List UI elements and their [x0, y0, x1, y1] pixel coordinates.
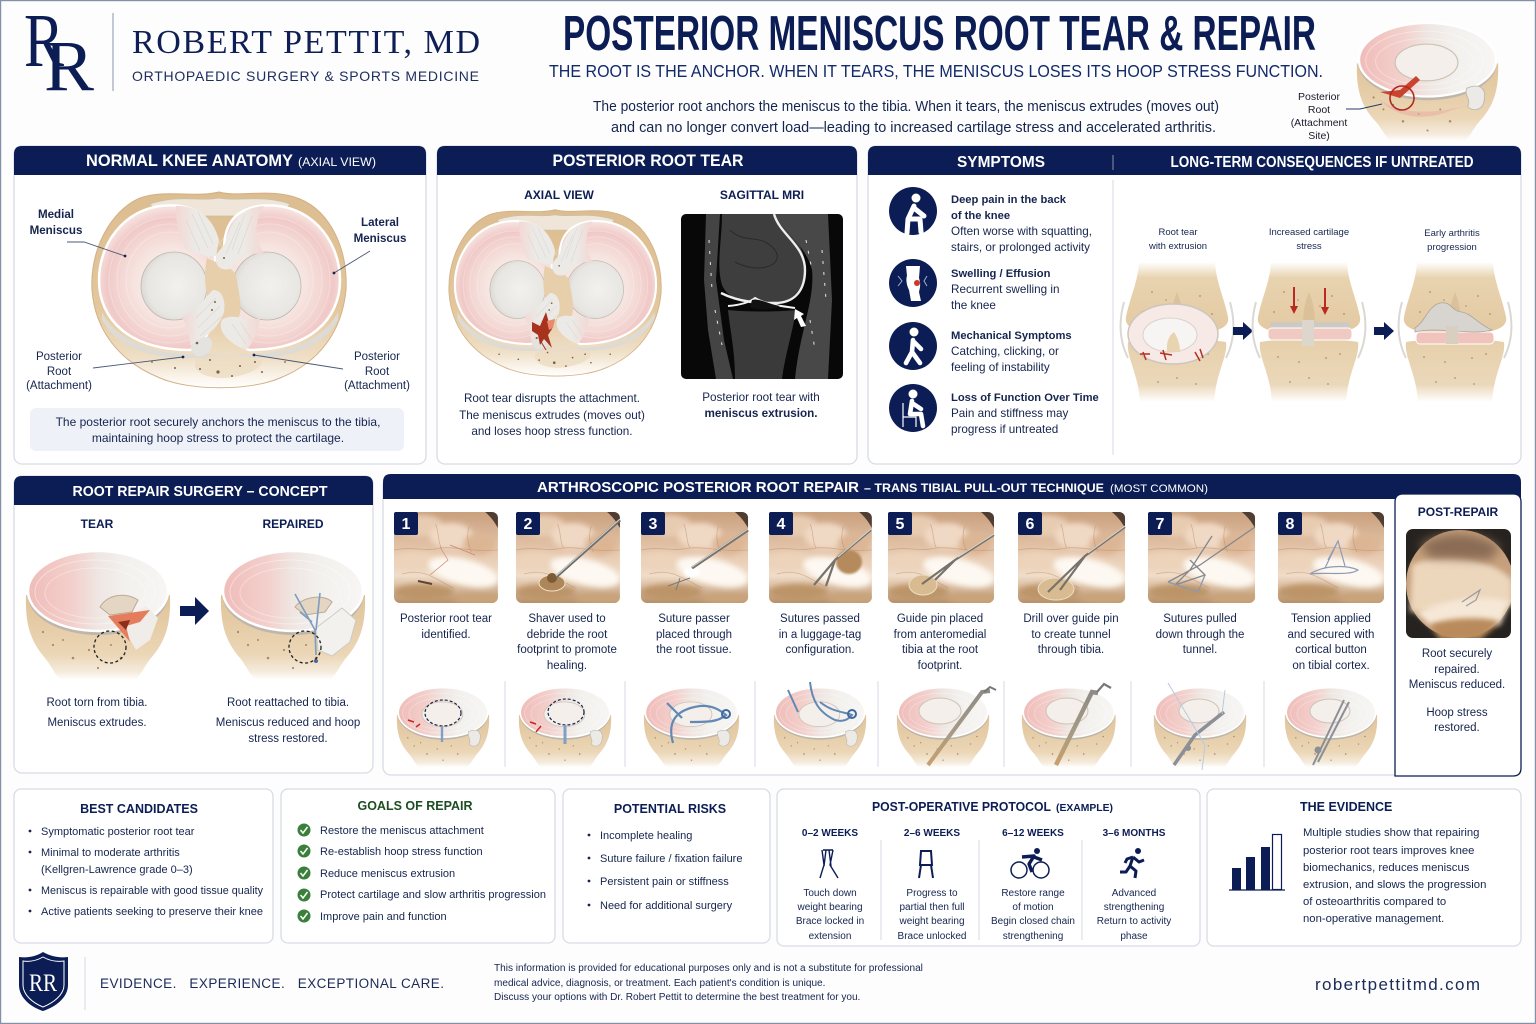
icon: person with knee pain — [889, 187, 937, 235]
label: posterior root left: (Attachment) — [26, 380, 92, 392]
caption 5: Guide pin placed — [897, 613, 983, 625]
symptom: mechanical — [889, 322, 1072, 374]
stage: root tear with extrusion — [1121, 227, 1233, 402]
label: posterior root left: Posterior — [36, 351, 82, 363]
post-repair text: Hoop stress — [1426, 707, 1488, 719]
step number 4 — [769, 512, 793, 535]
symptom: swelling: Recurrent swelling in — [951, 283, 1059, 296]
risk list: Incomplete healing — [600, 830, 692, 842]
disclaimer: medical advice, diagnosis, or treatment. Each patient's condition is unique. — [494, 978, 825, 989]
step number 1 — [394, 512, 418, 535]
step 1 — [390, 512, 504, 768]
caption 5: from anteromedial — [894, 629, 986, 641]
footer slogan: EVIDENCE. EXPERIENCE. EXCEPTIONAL CARE. — [100, 976, 444, 991]
symptom: mechanical: feeling of instability — [951, 361, 1050, 374]
tear illustration — [26, 551, 170, 680]
heading: ROOT REPAIR SURGERY – CONCEPT — [72, 484, 328, 500]
step number 4: 4 — [777, 516, 786, 533]
goal list: Reduce meniscus extrusion — [320, 868, 455, 880]
evidence text: posterior root tears improves knee — [1303, 845, 1474, 857]
caption 4: in a luggage-tag — [779, 629, 861, 641]
stage: root tear with extrusion: Root tear — [1158, 227, 1198, 238]
mri description: Posterior root tear with — [702, 391, 820, 404]
phase: 3-6 months: phase — [1120, 931, 1148, 942]
step number 2 — [516, 512, 540, 535]
goal list — [298, 824, 546, 923]
post-repair text: Root securely — [1422, 648, 1492, 660]
axial knee with tear — [449, 210, 661, 376]
intro paragraph — [593, 99, 1219, 136]
stage: increased cartilage stress: Increased cartilage — [1269, 227, 1349, 238]
caption 1: identified. — [421, 629, 471, 641]
callout label: Posterior — [1298, 91, 1341, 103]
post-repair text: Meniscus reduced. — [1409, 679, 1505, 691]
phase: 0-2 weeks: Touch down — [803, 888, 857, 899]
caption 2: debride the root — [527, 629, 608, 641]
caption 8: cortical button — [1295, 644, 1367, 656]
repaired sub-heading: REPAIRED — [262, 517, 324, 531]
step 7 — [1144, 512, 1261, 770]
post-repair text: restored. — [1434, 722, 1480, 734]
heading: BEST CANDIDATES — [80, 802, 198, 816]
candidate list: Meniscus is repairable with good tissue quality — [41, 885, 263, 897]
label: medial meniscus — [30, 208, 126, 257]
phase: 6-12 weeks: of motion — [1012, 902, 1054, 913]
symptom: loss of function: progress if untreated — [951, 423, 1058, 436]
post-repair heading: POST-REPAIR — [1418, 505, 1499, 519]
step number 5 — [888, 512, 912, 535]
caption 2: healing. — [547, 660, 587, 672]
goal list: Protect cartilage and slow arthritis progression — [320, 889, 546, 901]
mri description: meniscus extrusion. — [704, 407, 818, 420]
note box: maintaining hoop stress to protect the cartilage. — [92, 431, 344, 445]
step number 8: 8 — [1286, 516, 1295, 533]
monogram logo — [24, 0, 94, 106]
candidate list: Symptomatic posterior root tear — [41, 826, 195, 838]
caption 4: configuration. — [785, 644, 855, 656]
symptom: swelling: Swelling / Effusion — [951, 268, 1051, 280]
repaired caption: stress restored. — [248, 733, 328, 745]
label: lateral meniscus: Meniscus — [354, 232, 406, 245]
heading: long-term consequences: LONG-TERM CONSEQUENCES IF UNTREATED — [1170, 154, 1474, 171]
step number 3 — [641, 512, 665, 535]
caption 3: placed through — [656, 629, 732, 641]
heading: – TRANS TIBIAL PULL-OUT TECHNIQUE — [864, 483, 1104, 495]
heading: (AXIAL VIEW) — [298, 157, 376, 169]
goal list: Restore the meniscus attachment — [320, 825, 484, 837]
caption 5: footprint. — [918, 660, 962, 672]
evidence text: non-operative management. — [1303, 913, 1444, 925]
step number 6 — [1018, 512, 1042, 535]
illustration 4 — [774, 682, 866, 768]
step 3 — [637, 512, 754, 768]
post-repair arthroscopic photo — [1406, 529, 1514, 640]
panel: normal knee anatomy — [14, 146, 426, 464]
heading: NORMAL KNEE ANATOMY — [86, 152, 293, 170]
caption 6: to create tunnel — [1031, 629, 1111, 641]
caption 2: footprint to promote — [517, 644, 617, 656]
evidence text: Multiple studies show that repairing — [1303, 827, 1479, 839]
phase: 3-6 months: 3–6 MONTHS — [1103, 828, 1166, 839]
symptom: loss of function: Loss of Function Over Time — [951, 392, 1099, 404]
intro paragraph: and can no longer convert load—leading to increased cartilage stress and accelerated arthritis. — [611, 120, 1216, 136]
website: robertpettitmd.com — [1315, 975, 1480, 994]
caption 7: tunnel. — [1183, 644, 1217, 656]
heading: (MOST COMMON) — [1110, 483, 1208, 495]
caption 8: and secured with — [1288, 629, 1374, 641]
phase: 2-6 weeks: weight bearing — [898, 916, 965, 927]
phase: 3-6 months: Advanced — [1112, 888, 1156, 899]
heading: POTENTIAL RISKS — [614, 802, 726, 816]
post-repair sub-panel — [1395, 494, 1521, 776]
caption 5: tibia at the root — [902, 644, 979, 656]
header knee thumbnail with root callout — [1291, 23, 1498, 142]
phase: 6-12 weeks: strengthening — [1003, 931, 1063, 942]
label: lateral meniscus — [333, 216, 406, 274]
heading: THE EVIDENCE — [1300, 800, 1392, 814]
symptom: deep pain: Deep pain in the back — [951, 194, 1067, 206]
panel: arthroscopic repair steps — [383, 474, 1521, 776]
tear description: and loses hoop stress function. — [471, 425, 633, 438]
candidate list: (Kellgren-Lawrence grade 0–3) — [41, 864, 193, 876]
monogram logo: R — [24, 0, 64, 83]
goal list: Re-establish hoop stress function — [320, 846, 483, 858]
illustration 1 — [397, 688, 489, 768]
axial view sub-heading: AXIAL VIEW — [524, 188, 595, 202]
arthroscopic photo 1 — [390, 512, 504, 604]
panel: root repair surgery concept — [14, 476, 373, 773]
sagittal mri image — [681, 214, 843, 379]
caption 6: Drill over guide pin — [1023, 613, 1119, 625]
symptom: deep pain: Often worse with squatting, — [951, 225, 1092, 238]
sagittal mri sub-heading: SAGITTAL MRI — [720, 188, 804, 202]
phase: 2-6 weeks — [898, 828, 966, 942]
caption 3: the root tissue. — [656, 644, 732, 656]
step number 7 — [1148, 512, 1172, 535]
post-repair text: repaired. — [1434, 664, 1480, 676]
footer shield logo: RR — [29, 970, 57, 997]
heading: ARTHROSCOPIC POSTERIOR ROOT REPAIR — [537, 480, 860, 496]
step 4 — [765, 512, 878, 768]
disclaimer: Discuss your options with Dr. Robert Pettit to determine the best treatment for you. — [494, 992, 860, 1003]
header logo block — [24, 0, 480, 106]
disclaimer: This information is provided for educational purposes only and is not a substitute for professional — [494, 963, 923, 974]
arthroscopic photo 6 — [1014, 512, 1131, 604]
label: posterior root right: Root — [365, 366, 390, 378]
step number 8 — [1278, 512, 1302, 535]
stage: early arthritis progression: progression — [1427, 242, 1477, 253]
symptom: loss of function: Pain and stiffness may — [951, 407, 1069, 420]
candidate list — [29, 826, 263, 918]
icon: swollen knee — [889, 259, 937, 307]
caption 7: down through the — [1156, 629, 1244, 641]
label: posterior root right — [253, 351, 410, 392]
step number 5: 5 — [896, 516, 905, 533]
heading: GOALS OF REPAIR — [357, 799, 473, 813]
heading: symptoms: SYMPTOMS — [957, 154, 1045, 171]
footer shield logo — [19, 952, 68, 1011]
panel: the evidence — [1207, 789, 1521, 946]
step number 6: 6 — [1026, 516, 1035, 533]
candidate list: Active patients seeking to preserve their knee — [41, 906, 263, 918]
phase: 3-6 months: Return to activity — [1097, 916, 1171, 927]
illustration 2 — [519, 688, 611, 768]
phase: 3-6 months — [1097, 828, 1171, 942]
arthroscopic photo 2 — [512, 512, 626, 604]
phase: 0-2 weeks: Brace locked in — [796, 916, 864, 927]
caption 1: Posterior root tear — [400, 613, 492, 625]
callout label: Site) — [1308, 130, 1330, 142]
label: medial meniscus: Meniscus — [30, 224, 82, 237]
symptom: swelling: the knee — [951, 299, 996, 312]
phase: 6-12 weeks: Restore range — [1001, 888, 1065, 899]
symptom: swelling — [889, 259, 1059, 312]
illustration 7 — [1154, 683, 1246, 770]
caption 3: Suture passer — [658, 613, 730, 625]
caption 7: Sutures pulled — [1163, 613, 1237, 625]
risk list: Persistent pain or stiffness — [600, 876, 729, 888]
arrow — [1233, 322, 1253, 340]
tear description: Root tear disrupts the attachment. — [464, 392, 640, 405]
caption 4: Sutures passed — [780, 613, 860, 625]
phase: 0-2 weeks: 0–2 WEEKS — [802, 828, 858, 839]
candidate list: Minimal to moderate arthritis — [41, 847, 180, 859]
repaired caption: Meniscus reduced and hoop — [216, 717, 360, 729]
arrow — [1374, 322, 1394, 340]
subtitle: THE ROOT IS THE ANCHOR. WHEN IT TEARS, THE MENISCUS LOSES ITS HOOP STRESS FUNCTION. — [549, 61, 1323, 81]
symptom: mechanical: Catching, clicking, or — [951, 345, 1059, 358]
step 5 — [884, 512, 1000, 768]
practice name: ROBERT PETTIT, MD — [132, 24, 480, 61]
symptom: deep pain: of the knee — [951, 210, 1010, 222]
evidence text: biomechanics, reduces meniscus — [1303, 862, 1470, 874]
step number 2: 2 — [524, 516, 533, 533]
evidence text: of osteoarthritis compared to — [1303, 896, 1446, 908]
symptom: mechanical: Mechanical Symptoms — [951, 330, 1072, 342]
stage: increased cartilage stress: stress — [1296, 241, 1322, 252]
risk list: Suture failure / fixation failure — [600, 853, 742, 865]
repaired illustration — [221, 551, 365, 680]
icon: cyclist — [1011, 848, 1049, 878]
practice tagline: ORTHOPAEDIC SURGERY & SPORTS MEDICINE — [132, 68, 479, 84]
note box — [30, 408, 404, 451]
panel: best candidates — [14, 789, 273, 943]
panel: goals of repair — [281, 789, 555, 943]
caption 6: through tibia. — [1038, 644, 1104, 656]
symptom: deep pain — [889, 187, 1092, 254]
stage: increased cartilage stress — [1253, 227, 1365, 402]
label: medial meniscus: Medial — [38, 208, 74, 221]
phase: 0-2 weeks: extension — [809, 931, 851, 942]
arthroscopic photo 3 — [637, 512, 754, 604]
step 2 — [512, 512, 626, 768]
phase: 2-6 weeks: Brace unlocked — [898, 931, 966, 942]
step 6 — [1014, 512, 1131, 768]
arthroscopic photo 7 — [1144, 512, 1261, 604]
label: posterior root left — [26, 351, 184, 392]
phase: 6-12 weeks: Begin closed chain — [991, 916, 1075, 927]
callout label: (Attachment — [1291, 117, 1347, 129]
step number 3: 3 — [649, 516, 658, 533]
phase: 2-6 weeks: Progress to — [906, 888, 958, 899]
arthroscopic photo 8 — [1274, 512, 1390, 604]
caption 8: on tibial cortex. — [1292, 660, 1370, 672]
icon: walker brace — [919, 851, 933, 878]
risk list: Need for additional surgery — [600, 900, 733, 912]
phase: 6-12 weeks — [991, 828, 1075, 942]
phase: 3-6 months: strengthening — [1104, 902, 1164, 913]
label: lateral meniscus: Lateral — [361, 216, 399, 229]
arthroscopic photo 4 — [765, 512, 878, 604]
icon: walking person — [889, 322, 937, 370]
callout label: Root — [1308, 104, 1330, 116]
evidence text: extrusion, and slows the progression — [1303, 879, 1486, 891]
arthroscopic photo 5 — [884, 512, 1000, 604]
phase: 0-2 weeks — [796, 828, 864, 942]
repaired caption: Root reattached to tibia. — [227, 697, 349, 709]
intro paragraph: The posterior root anchors the meniscus to the tibia. When it tears, the meniscus extrudes (moves out) — [593, 99, 1219, 115]
phase: 2-6 weeks: 2–6 WEEKS — [904, 828, 960, 839]
arrow — [180, 597, 209, 625]
tear caption: Root torn from tibia. — [47, 697, 147, 709]
step number 7: 7 — [1156, 516, 1165, 533]
heading: POST-OPERATIVE PROTOCOL — [872, 800, 1051, 814]
note box: The posterior root securely anchors the meniscus to the tibia, — [56, 415, 380, 429]
heading: (EXAMPLE) — [1056, 802, 1113, 814]
icon: crutches — [820, 850, 838, 878]
tear sub-heading: TEAR — [81, 517, 114, 531]
icon: seated person — [889, 384, 937, 432]
tear caption: Meniscus extrudes. — [47, 717, 147, 729]
panel: symptoms and consequences — [868, 146, 1521, 464]
symptom: deep pain: stairs, or prolonged activity — [951, 241, 1090, 254]
illustration 8 — [1285, 688, 1377, 768]
panel: posterior root tear — [437, 146, 857, 464]
phase: 6-12 weeks: 6–12 WEEKS — [1002, 828, 1064, 839]
stage: root tear with extrusion: with extrusion — [1148, 241, 1207, 252]
illustration 3 — [644, 688, 739, 768]
step number 1: 1 — [402, 516, 411, 533]
goal list: Improve pain and function — [320, 911, 447, 923]
risk list — [588, 830, 742, 912]
label: posterior root right: (Attachment) — [344, 380, 410, 392]
illustration 5 — [897, 687, 996, 768]
label: posterior root left: Root — [47, 366, 72, 378]
step 8 — [1274, 512, 1390, 768]
panel: potential risks — [563, 789, 770, 943]
stage: early arthritis progression — [1399, 228, 1511, 402]
illustration 6 — [1022, 684, 1116, 768]
tear description: The meniscus extrudes (moves out) — [459, 409, 645, 422]
phase: 2-6 weeks: partial then full — [899, 902, 965, 913]
symptom: loss of function — [889, 384, 1099, 436]
stage: early arthritis progression: Early arthritis — [1424, 228, 1480, 239]
icon: bar chart — [1229, 834, 1285, 890]
panel: post-operative protocol — [777, 789, 1200, 946]
icon: runner — [1120, 848, 1144, 878]
monogram logo: R — [44, 26, 94, 106]
caption 2: Shaver used to — [528, 613, 606, 625]
label: posterior root right: Posterior — [354, 351, 400, 363]
heading: POSTERIOR ROOT TEAR — [552, 152, 744, 170]
phase: 0-2 weeks: weight bearing — [796, 902, 863, 913]
caption 8: Tension applied — [1291, 613, 1371, 625]
axial knee illustration — [92, 192, 346, 388]
